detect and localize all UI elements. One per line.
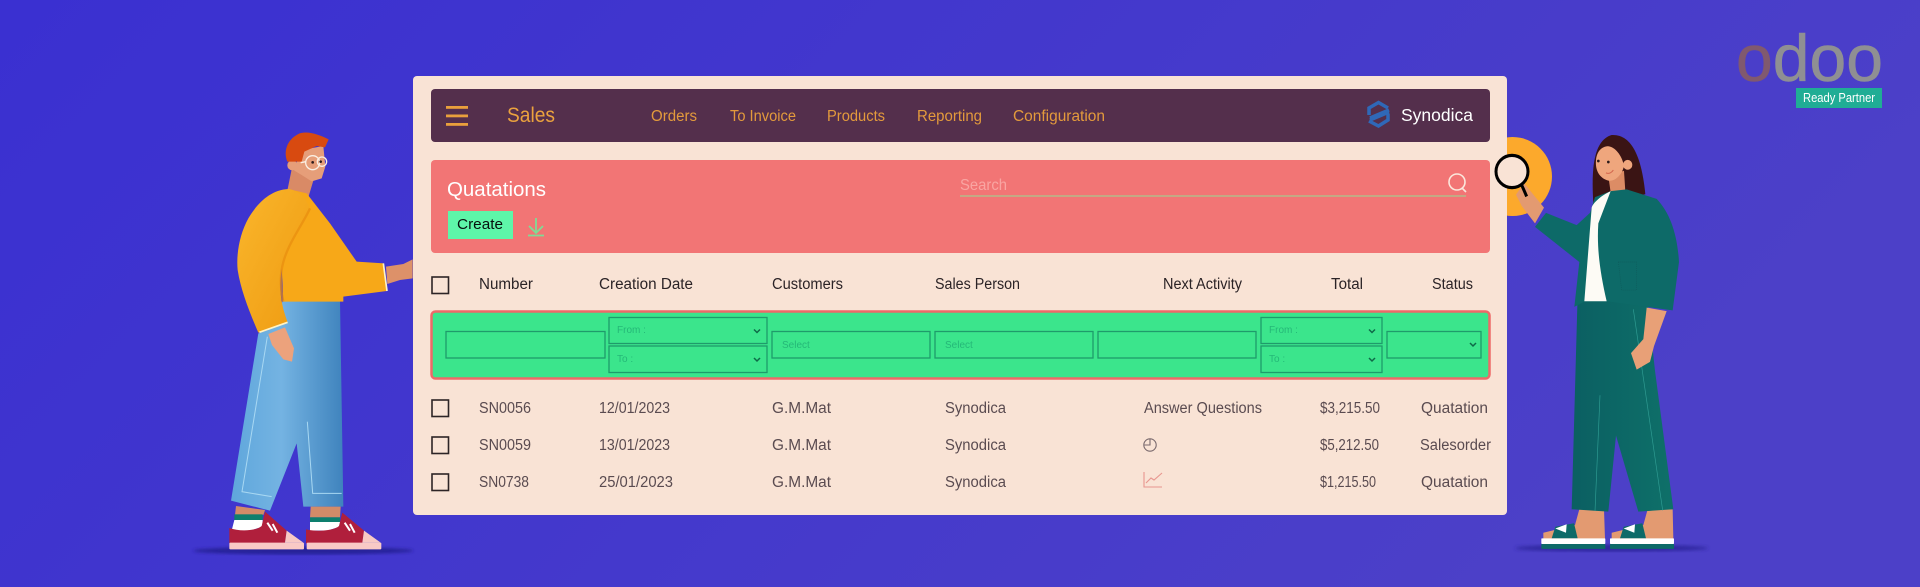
row SN0059: Salesorder xyxy=(1420,437,1491,454)
total filter: From : xyxy=(1269,325,1298,336)
select all checkbox xyxy=(432,277,448,294)
face xyxy=(1596,146,1624,181)
create button xyxy=(448,211,513,239)
trousers xyxy=(231,300,343,511)
header panel: quotations xyxy=(431,160,1490,253)
row SN0059: 13/01/2023 xyxy=(599,437,670,454)
filter bar xyxy=(432,312,1490,378)
icon: synodica logo xyxy=(1369,102,1389,126)
sweater body and front sleeve xyxy=(282,189,387,302)
customers filter xyxy=(772,332,930,358)
ground shadow xyxy=(1515,545,1708,552)
trousers xyxy=(1572,294,1673,512)
icon: line chart xyxy=(1144,472,1162,487)
icon: download xyxy=(528,218,544,236)
row SN0738: SN0738 xyxy=(479,474,529,491)
next activity filter xyxy=(1098,332,1256,358)
creation date filter xyxy=(609,318,767,372)
leg skin xyxy=(1543,509,1673,539)
row SN0056: G.M.Mat xyxy=(772,400,832,417)
sales person filter xyxy=(935,332,1093,358)
ear xyxy=(1623,160,1632,170)
table header row: Total xyxy=(1331,276,1363,293)
row SN0056: 12/01/2023 xyxy=(599,400,670,417)
row SN0056 xyxy=(432,400,1488,417)
status filter xyxy=(1387,332,1481,358)
row SN0059 xyxy=(432,437,1491,454)
pocket xyxy=(1618,262,1637,290)
sleeve shadow xyxy=(281,208,310,302)
row SN0056: Quatation xyxy=(1421,400,1488,417)
right hand xyxy=(386,259,413,284)
nav links: To Invoice xyxy=(730,108,796,125)
socks and left shoe xyxy=(229,506,304,549)
nav links: Products xyxy=(827,108,885,125)
nav links: Reporting xyxy=(917,108,982,125)
creation date filter: To : xyxy=(617,354,633,365)
cuffs xyxy=(259,263,387,332)
row SN0059: SN0059 xyxy=(479,437,531,454)
row SN0059: Synodica xyxy=(945,437,1006,454)
eyes xyxy=(311,160,322,164)
row SN0738: G.M.Mat xyxy=(772,474,832,491)
ready partner badge xyxy=(1796,88,1882,108)
row SN0056: Synodica xyxy=(945,400,1006,417)
navigation bar xyxy=(431,89,1490,142)
table header row: Sales Person xyxy=(935,276,1020,293)
table rows xyxy=(432,400,1491,491)
total filter: To : xyxy=(1269,354,1285,365)
sales person filter: Select xyxy=(945,340,973,351)
row SN0738: 25/01/2023 xyxy=(599,474,673,491)
neck xyxy=(1608,171,1625,193)
table header row: Customers xyxy=(772,276,843,293)
nav links: Configuration xyxy=(1013,108,1105,125)
row SN0056: Answer Questions xyxy=(1144,400,1262,417)
magnifier xyxy=(1496,155,1528,196)
row SN0056: SN0056 xyxy=(479,400,531,417)
nav links: Orders xyxy=(651,108,697,125)
eyes and mouth xyxy=(1597,160,1613,173)
forearm hand xyxy=(1516,183,1544,223)
row SN0738: Synodica xyxy=(945,474,1006,491)
left hand xyxy=(268,327,294,362)
hair back xyxy=(1593,135,1645,204)
search underline xyxy=(960,195,1466,197)
nav title: Sales xyxy=(507,104,555,127)
jacket xyxy=(1535,189,1679,310)
neck xyxy=(287,169,314,197)
panel title: Quatations xyxy=(447,179,546,201)
ready partner badge: Ready Partner xyxy=(1803,90,1876,105)
hair xyxy=(286,133,329,162)
row SN0738: Quatation xyxy=(1421,474,1488,491)
glasses xyxy=(301,156,327,170)
row SN0059: G.M.Mat xyxy=(772,437,832,454)
create button: Create xyxy=(457,216,503,233)
trouser seams xyxy=(1595,309,1663,511)
creation date filter: From : xyxy=(617,325,646,336)
table header row xyxy=(432,276,1473,294)
table header row: Next Activity xyxy=(1163,276,1242,293)
ear xyxy=(287,160,297,170)
arm and hand xyxy=(1631,308,1667,370)
row SN0056: $3,215.50 xyxy=(1320,400,1380,417)
row SN0738: $1,215.50 xyxy=(1320,474,1376,491)
brand name: Synodica xyxy=(1401,105,1473,125)
icon: search xyxy=(1449,174,1466,192)
logo wordmark: odoo xyxy=(1736,21,1883,95)
white shirt xyxy=(1584,191,1611,301)
icon: hamburger menu xyxy=(446,106,468,126)
icon: pie clock xyxy=(1144,439,1156,451)
odoo logo xyxy=(1736,21,1883,108)
nav links xyxy=(651,108,1105,125)
table header row: Status xyxy=(1432,276,1473,293)
table header row: Creation Date xyxy=(599,276,693,293)
row SN0738 xyxy=(432,474,1488,491)
socks and right shoe xyxy=(306,507,381,549)
row SN0059: $5,212.50 xyxy=(1320,437,1379,454)
ground shadow xyxy=(193,547,413,555)
customers filter: Select xyxy=(782,340,810,351)
character: woman with magnifier xyxy=(1496,135,1708,552)
yellow circle behind magnifier xyxy=(1473,137,1552,216)
total filter xyxy=(1261,318,1382,372)
table header row: Number xyxy=(479,276,533,293)
sweater back sleeve xyxy=(237,189,310,333)
ui card panel xyxy=(413,76,1507,515)
trouser seams xyxy=(242,337,342,497)
search placeholder: Search xyxy=(960,177,1007,194)
character: man with yellow sweater xyxy=(193,133,413,555)
sandals xyxy=(1541,523,1674,549)
head xyxy=(293,146,325,181)
number filter xyxy=(446,332,605,358)
